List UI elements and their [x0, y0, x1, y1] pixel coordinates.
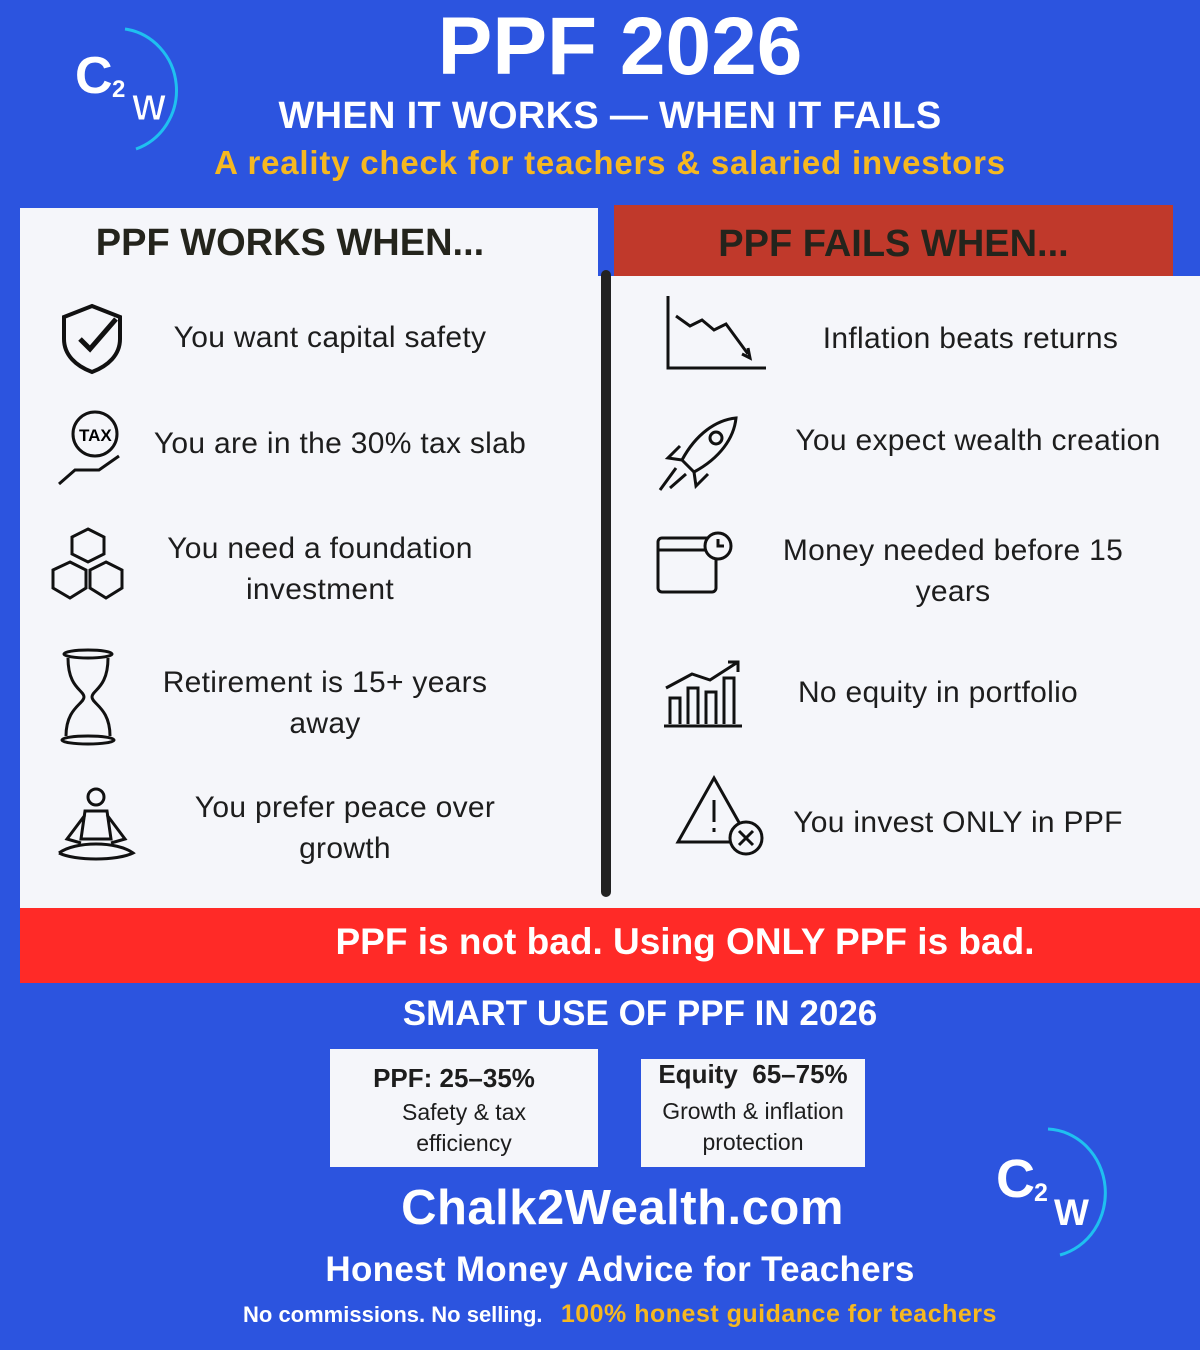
box: equity: Growth & inflation protection — [662, 1098, 844, 1155]
heading fails: PPF FAILS WHEN... — [718, 223, 1069, 265]
icon: tax hand: TAX — [79, 426, 112, 445]
banner: PPF is not bad. Using ONLY PPF is bad. — [335, 921, 1034, 962]
logo top — [75, 28, 178, 150]
heading works: PPF WORKS WHEN... — [96, 222, 484, 264]
logo bottom — [996, 1128, 1107, 1256]
text f5: You invest ONLY in PPF — [793, 806, 1123, 839]
divider line — [601, 270, 611, 897]
icon: meditation — [58, 788, 136, 860]
heading fails — [614, 205, 1173, 276]
icon: cubes — [52, 527, 124, 600]
icon: bar growth — [664, 660, 742, 728]
footer: No commissions. No selling. 100% honest guidance for teachers — [243, 1300, 997, 1328]
panel: works — [20, 208, 598, 983]
text 1: You want capital safety — [174, 321, 486, 354]
slogan: Honest Money Advice for Teachers — [325, 1250, 915, 1289]
logo top: W — [132, 87, 166, 128]
logo bottom: C — [996, 1149, 1035, 1209]
text 2: You are in the 30% tax slab — [154, 427, 526, 460]
box: ppf: Safety & tax — [402, 1099, 526, 1125]
text 5: You prefer peace over growth — [195, 791, 495, 865]
panel: fails — [598, 276, 1200, 908]
website: Chalk2Wealth.com — [401, 1181, 844, 1235]
smart use heading: SMART USE OF PPF IN 2026 — [403, 994, 877, 1033]
icon: hourglass — [60, 648, 116, 746]
tagline: A reality check for teachers & salaried investors — [214, 144, 1006, 181]
text f3: Money needed before 15 years — [783, 534, 1123, 608]
icon: tax hand — [58, 410, 120, 486]
icon: shield — [62, 304, 122, 374]
logo bottom: W — [1054, 1192, 1089, 1233]
icon: calendar — [656, 532, 732, 594]
icon: warning — [676, 775, 764, 856]
text f2: You expect wealth creation — [795, 424, 1161, 457]
title: PPF 2026 — [438, 1, 802, 92]
text 4: Retirement is 15+ years away — [163, 666, 487, 740]
logo bottom: 2 — [1034, 1179, 1048, 1207]
box: equity — [641, 1059, 865, 1167]
text 3: You need a foundation investment — [167, 532, 473, 606]
text f1: Inflation beats returns — [823, 322, 1118, 355]
logo top: 2 — [112, 76, 125, 103]
icon: rocket — [658, 416, 738, 491]
logo top: C — [75, 47, 113, 105]
icon: down chart — [666, 296, 766, 370]
banner — [20, 908, 1200, 983]
text f4: No equity in portfolio — [798, 676, 1078, 709]
subtitle: WHEN IT WORKS — WHEN IT FAILS — [278, 95, 942, 137]
box: ppf: PPF: 25–35% — [373, 1063, 535, 1093]
box: ppf — [330, 1049, 598, 1167]
box: ppf: efficiency — [416, 1130, 512, 1156]
box: equity: Equity 65–75% — [658, 1059, 848, 1089]
